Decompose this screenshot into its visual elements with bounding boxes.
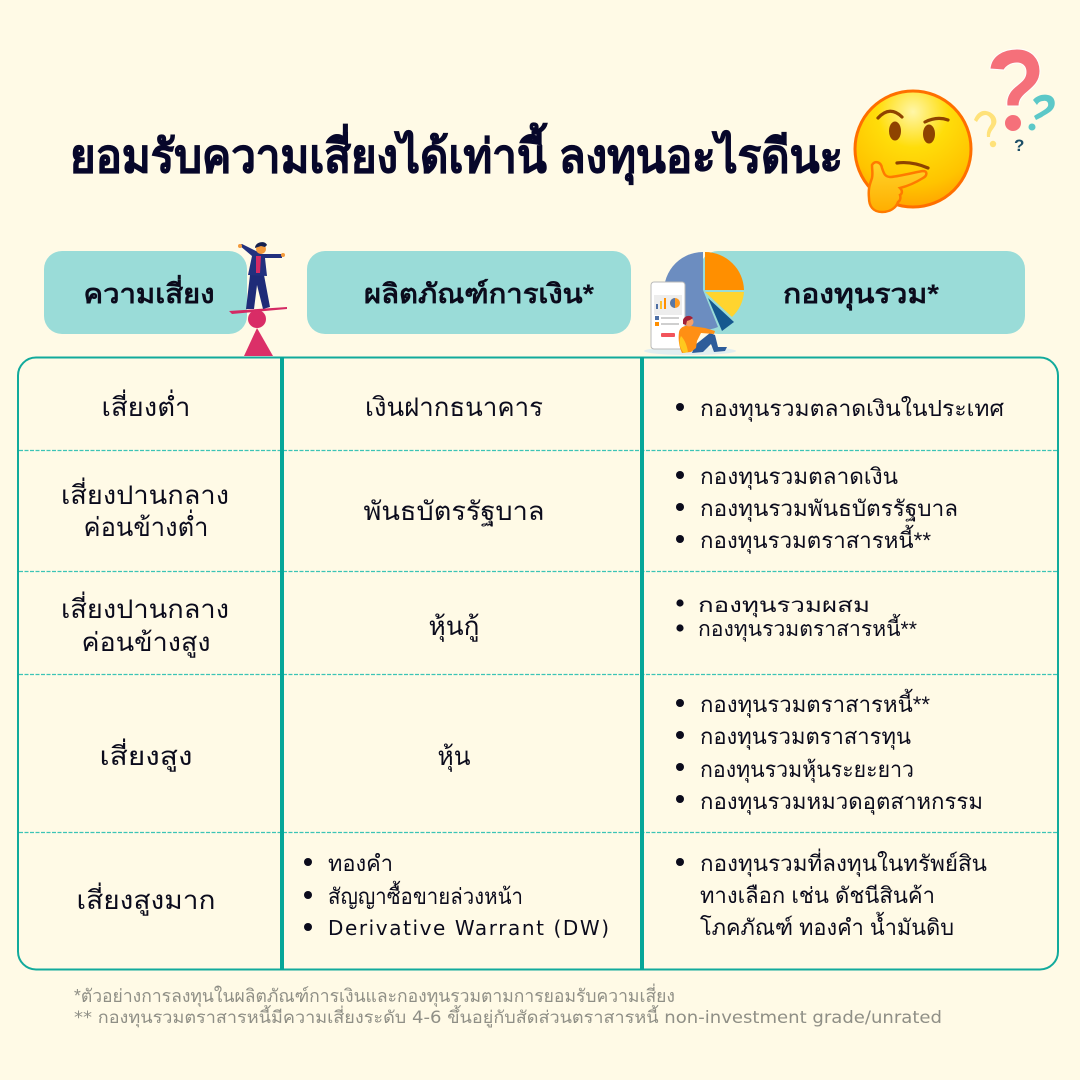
fund list: row 4: กองทุนรวมตราสารทุน [700, 724, 911, 750]
fund list: row 4 [676, 689, 983, 815]
row 5 product list: สัญญาซื้อขายล่วงหน้า [328, 881, 523, 909]
header: กองทุนรวม: กองทุนรวม* [783, 279, 940, 311]
row 4: high risk: หุ้น [438, 741, 471, 772]
fund list: row 4: กองทุนรวมหมวดอุตสาหกรรม [700, 789, 983, 815]
icon: pie chart with person and phone [644, 252, 744, 355]
row 3: medium high risk: หุ้นกู้ [428, 611, 480, 642]
icon: question marks: ? [1014, 136, 1024, 155]
fund list: row 5: ทางเลือก เช่น ดัชนีสินค้า [700, 883, 935, 908]
fund list: row 2: กองทุนรวมพันธบัตรรัฐบาล [700, 496, 958, 522]
row 2: medium low risk: เสี่ยงปานกลาง [61, 477, 229, 510]
fund list: row 4: กองทุนรวมหุ้นระยะยาว [700, 757, 914, 783]
fund list: row 3: กองทุนรวมผสม [698, 595, 870, 618]
row 2: medium low risk [61, 477, 544, 542]
table [18, 357, 1058, 970]
header: ความเสี่ยง: ความเสี่ยง [84, 274, 214, 309]
footnotes [74, 983, 942, 1028]
row 5 product list [304, 851, 609, 940]
row 1: low risk: เงินฝากธนาคาร [365, 392, 543, 422]
row 5 product list: ทองคำ [328, 851, 393, 876]
footnotes: *ตัวอย่างการลงทุนในผลิตภัณฑ์การเงินและกองทุนรวมตามการยอมรับความเสี่ยง [74, 983, 675, 1007]
fund list: row 5 [676, 848, 987, 940]
fund list: row 3 [676, 595, 917, 642]
fund list: row 1: กองทุนรวมตลาดเงินในประเทศ [700, 396, 1004, 422]
fund list: row 5: กองทุนรวมที่ลงทุนในทรัพย์สิน [700, 848, 987, 877]
header: ผลิตภัณฑ์การเงิน: ผลิตภัณฑ์การเงิน* [364, 278, 595, 309]
row 5 product list: Derivative Warrant (DW) [328, 916, 609, 940]
fund list: row 3: กองทุนรวมตราสารหนี้** [698, 614, 917, 642]
fund list: row 5: โภคภัณฑ์ ทองคำ น้ำมันดิบ [700, 912, 954, 940]
header: กองทุนรวม [700, 251, 1025, 334]
fund list: row 4: กองทุนรวมตราสารหนี้** [700, 689, 930, 718]
row 5: very high risk: เสี่ยงสูงมาก [76, 882, 216, 916]
header: ผลิตภัณฑ์การเงิน [307, 251, 631, 334]
row 4: high risk [100, 738, 471, 772]
icon: thinking face emoji [855, 91, 971, 212]
row 2: medium low risk: พันธบัตรรัฐบาล [364, 496, 544, 527]
fund list: row 2 [676, 464, 958, 554]
icon: question marks [974, 49, 1055, 155]
icon: businessman balancing [229, 242, 287, 356]
row 3: medium high risk: ค่อนข้างสูง [82, 627, 210, 658]
header: ความเสี่ยง [44, 251, 247, 334]
row 1: low risk: เสี่ยงต่ำ [102, 389, 190, 422]
fund list: row 2: กองทุนรวมตลาดเงิน [700, 464, 898, 490]
fund list: row 2: กองทุนรวมตราสารหนี้** [700, 525, 931, 554]
row 3: medium high risk: เสี่ยงปานกลาง [61, 591, 229, 624]
title: ยอมรับความเสี่ยงได้เท่านี้ ลงทุนอะไรดีนะ [70, 122, 843, 185]
row 2: medium low risk: ค่อนข้างต่ำ [84, 509, 208, 542]
row 4: high risk: เสี่ยงสูง [100, 738, 192, 772]
row 3: medium high risk [61, 591, 480, 658]
row 1: low risk [102, 389, 543, 422]
footnotes: ** กองทุนรวมตราสารหนี้มีความเสี่ยงระดับ 4-6 ขึ้นอยู่กับสัดส่วนตราสารหนี้ non-investment grade/unrated [74, 1005, 942, 1028]
